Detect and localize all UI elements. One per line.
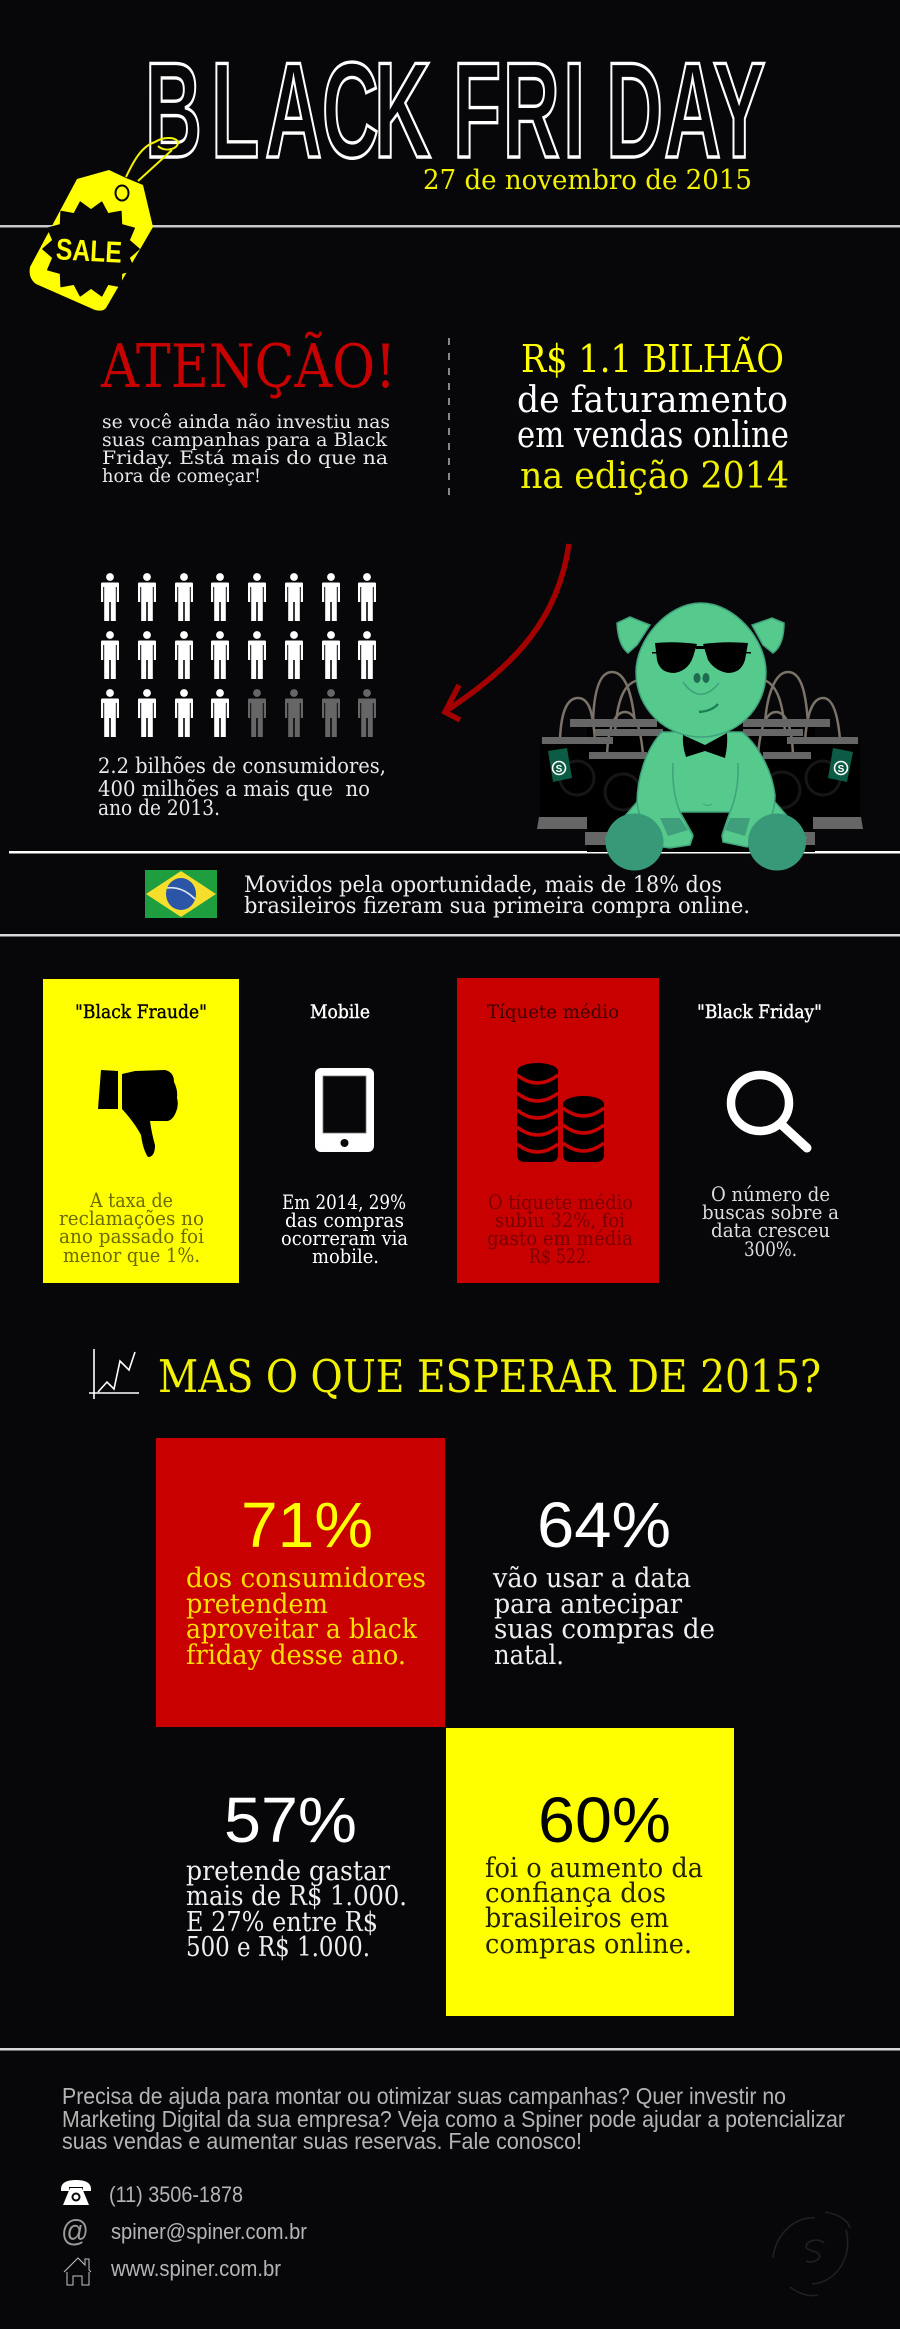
icon: brazil flag: [145, 870, 217, 918]
text: website: www.spiner.com.br: [110, 2256, 281, 2281]
panel: 60%: [446, 1728, 734, 2016]
text block: 71%: [186, 1563, 426, 1671]
text block: black fraude: reclamações no: [59, 1206, 204, 1230]
icon: thumbs down: [98, 1070, 178, 1157]
heading: black fraude: "Black Fraude": [75, 1001, 207, 1023]
text block: mobile: Em 2014, 29%: [282, 1190, 406, 1214]
illustration: pig with shopping bags: [537, 603, 863, 870]
pig body: [606, 603, 806, 850]
pig feet: [606, 814, 806, 870]
panel: 57%: [186, 1784, 407, 1963]
text block: atenção paragraph: hora de começar!: [102, 465, 261, 487]
text: email: spiner@spiner.com.br: [111, 2219, 307, 2244]
text block: 71%: dos consumidores: [186, 1563, 426, 1594]
heading: tíquete médio: Tíquete médio: [487, 1001, 619, 1023]
heading: black friday: "Black Friday": [697, 1001, 822, 1023]
icon: line chart: [89, 1349, 139, 1399]
people pictogram: [101, 573, 376, 737]
text block: mobile: [281, 1190, 408, 1268]
icon: spiner logo: [773, 2212, 850, 2296]
text block: consumidores: 400 milhões a mais que no: [98, 777, 370, 801]
text block: black fraude: menor que 1%.: [63, 1243, 200, 1267]
text block: mobile: ocorreram via: [281, 1226, 408, 1250]
text block: consumidores: ano de 2013.: [98, 796, 220, 820]
text block: 60%: confiança dos: [485, 1878, 666, 1909]
text block: tíquete médio: [487, 1190, 633, 1268]
text block: call to action: Marketing Digital da sua empresa? Veja como a Spiner pode ajudar a potencializar: [62, 2106, 845, 2132]
text block: black fraude: A taxa de: [89, 1188, 173, 1212]
heading: mobile: Mobile: [310, 1001, 370, 1023]
text block: 71%: pretendem: [186, 1589, 328, 1620]
text block: black fraude: [59, 1188, 204, 1267]
text block: call to action: Precisa de ajuda para montar ou otimizar suas campanhas? Quer investir no: [62, 2083, 786, 2109]
pig sunglasses: [652, 642, 751, 673]
text block: mobile: das compras: [285, 1208, 404, 1232]
icon: sale tag: [30, 138, 178, 311]
text block: 60%: [485, 1853, 703, 1960]
text block: 60%: foi o aumento da: [485, 1853, 703, 1884]
text block: 60%: compras online.: [485, 1929, 692, 1960]
text block: call to action: [62, 2083, 845, 2154]
text block: faturamento: [517, 337, 789, 497]
text block: 57%: 500 e R$ 1.000.: [186, 1932, 370, 1963]
icon: at sign: @: [61, 2213, 89, 2248]
text block: brasileiros: brasileiros fizeram sua primeira compra online.: [244, 894, 750, 919]
text block: atenção paragraph: [102, 411, 390, 487]
text block: faturamento: em vendas online: [517, 415, 789, 456]
text block: tíquete médio: subiu 32%, foi: [495, 1208, 625, 1232]
icon: sale tag: SALE: [55, 233, 123, 270]
stat: 60%: 60%: [538, 1784, 671, 1856]
panel: black fraude: [43, 979, 239, 1283]
text block: tíquete médio: gasto em média: [487, 1226, 633, 1250]
text block: tíquete médio: O tíquete médio: [488, 1190, 633, 1214]
text block: buscas: [702, 1182, 839, 1261]
heading: atenção: ATENÇÃO!: [100, 331, 396, 402]
arrow: [445, 544, 569, 720]
icon: house: [64, 2258, 91, 2285]
text block: brasileiros: [244, 873, 750, 919]
text block: call to action: suas vendas e aumentar suas reservas. Fale conosco!: [62, 2128, 582, 2154]
text block: atenção paragraph: se você ainda não investiu nas: [102, 411, 390, 433]
text block: consumidores: [98, 754, 386, 820]
text block: atenção paragraph: suas campanhas para a Black: [102, 429, 387, 451]
text block: 64%: [492, 1563, 715, 1671]
date subtitle: 27 de novembro de 2015: [423, 165, 752, 196]
text: phone number: (11) 3506-1878: [109, 2182, 243, 2207]
text block: 64%: vão usar a data: [492, 1563, 691, 1594]
text block: 60%: brasileiros em: [485, 1903, 669, 1934]
text block: 64%: suas compras de: [494, 1614, 715, 1645]
text block: brasileiros: Movidos pela oportunidade, mais de 18% dos: [244, 873, 722, 898]
icon: magnifier: [731, 1075, 807, 1148]
text block: faturamento: na edição 2014: [520, 456, 789, 497]
text block: 71%: aproveitar a black: [186, 1614, 418, 1645]
text block: 57%: pretende gastar: [186, 1856, 390, 1887]
panel: 71%: [156, 1438, 445, 1727]
panel: 64%: [492, 1489, 715, 1671]
shopping bags: [537, 672, 863, 852]
text block: 64%: para antecipar: [494, 1589, 682, 1620]
panel: mobile: [281, 1001, 408, 1268]
panel: tíquete médio: [457, 978, 659, 1283]
shopping bags: S: [838, 764, 845, 775]
stat: 57%: 57%: [224, 1784, 357, 1856]
heading: 2015: MAS O QUE ESPERAR DE 2015?: [158, 1350, 821, 1403]
text block: 64%: natal.: [494, 1640, 564, 1671]
text block: buscas: data cresceu: [711, 1218, 830, 1242]
pig bow tie: [683, 733, 727, 758]
icon: coin stacks: [517, 1063, 604, 1162]
icon: telephone: [61, 2180, 91, 2205]
text block: 57%: mais de R$ 1.000.: [186, 1881, 407, 1912]
icon: smartphone: [315, 1068, 374, 1152]
text block: buscas: 300%.: [744, 1237, 797, 1261]
text block: consumidores: 2.2 bilhões de consumidores,: [98, 754, 386, 778]
text block: 57%: E 27% entre R$: [186, 1907, 378, 1938]
text block: faturamento: de faturamento: [517, 380, 788, 421]
title: BLACK FRIDAY: [145, 33, 765, 186]
text block: 57%: [186, 1856, 407, 1963]
text block: faturamento: R$ 1.1 BILHÃO: [521, 337, 784, 381]
text block: 71%: friday desse ano.: [186, 1640, 406, 1671]
stat: 64%: 64%: [537, 1489, 671, 1561]
panel: black friday buscas: [697, 1001, 839, 1261]
shopping bags: S: [556, 764, 563, 775]
text block: mobile: mobile.: [312, 1244, 379, 1268]
text block: tíquete médio: R$ 522.: [529, 1244, 591, 1268]
text block: buscas: buscas sobre a: [702, 1200, 839, 1224]
text block: buscas: O número de: [711, 1182, 830, 1206]
text block: black fraude: ano passado foi: [59, 1224, 204, 1248]
stat: 71%: 71%: [241, 1489, 373, 1561]
pig face: [683, 673, 719, 806]
text block: atenção paragraph: Friday. Está mais do que na: [102, 447, 388, 469]
